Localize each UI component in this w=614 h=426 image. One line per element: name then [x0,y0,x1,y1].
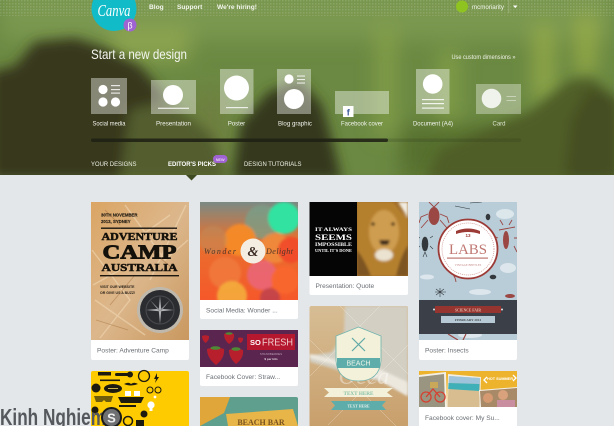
card: poster adventure camp: AUSTRALIA [102,262,178,274]
card: beach bar [200,397,298,426]
card: social media wonder [199,202,304,319]
icon: blog graphic [277,69,311,114]
card: beach poster: Ocea [339,364,389,390]
card: facebook cover my summer: HOT SUMMER [487,377,513,381]
card: poster adventure camp [91,202,189,360]
watermark: S [107,410,116,426]
card: facebook cover strawberry: Facebook Cover: Straw... [206,374,280,381]
badge: new: NEW [216,158,225,162]
user menu [456,0,518,13]
logo: Canva badge: Canva [98,1,130,20]
card: facebook cover my summer: Facebook cover: My Su... [425,415,500,422]
label: poster: Poster [228,122,245,128]
card: presentation quote: UNTIL IT'S DONE [315,248,352,253]
card: poster insects [417,202,517,360]
card: yellow icons poster [91,370,189,426]
card: poster insects: Poster: Insects [425,348,469,354]
icon: poster [220,69,254,114]
card: poster adventure camp: 30TH NOVEMBER [101,212,138,218]
card: poster insects: FEBRUARY 2014 [455,318,481,322]
tabs: DESIGN TUTORIALS [244,162,302,168]
card: poster insects: LABS [449,242,487,258]
card: facebook cover strawberry: FRESH [262,338,293,348]
logo: Canva badge: β [127,20,133,30]
card: presentation quote: Presentation: Quote [316,283,374,290]
top navigation [149,4,257,11]
heading: start a new design: Start a new design [91,47,187,62]
label: card: Card [492,122,506,128]
label: blog graphic: Blog graphic [278,122,312,128]
label: facebook cover: Facebook cover [341,122,383,128]
top navigation: We're hiring! [217,4,257,11]
card: facebook cover strawberry: SO [250,338,261,347]
link: use custom dimensions: Use custom dimensions » [452,54,516,61]
icon: document A4 [416,69,450,114]
card: poster adventure camp: Poster: Adventure Camp [97,348,169,354]
card: social media wonder: & [248,245,259,260]
icon: facebook cover: f [347,108,351,118]
top navigation: Blog [149,4,164,11]
card: poster adventure camp: VISIT OUR WEBSITE [100,285,135,289]
card: presentation quote [310,202,408,295]
tabs: YOUR DESIGNS [91,162,136,168]
tabs: EDITOR'S PICKS [168,162,216,168]
card: poster adventure camp: ADVENTURE [102,231,178,243]
logo: Canva badge [92,0,136,32]
card: beach poster: BEACH [346,360,371,368]
label: document A4: Document (A4) [413,122,453,128]
card: social media wonder: Social Media: Wonder ... [206,308,278,314]
card: beach poster: TEXT HERE [343,391,374,397]
card: facebook cover strawberry: $ per kilo [264,357,278,361]
card: poster adventure camp: CAMP [102,242,176,264]
top navigation: Support [177,4,203,11]
label: presentation: Presentation [156,122,191,128]
card: presentation quote: IMPOSSIBLE [315,242,353,248]
label: social media: Social media [92,122,126,128]
icon: card [476,84,521,114]
card: beach poster [310,306,408,426]
card: social media wonder: Wonder [204,247,237,256]
card: poster insects: VINTAGE BEETLES [455,263,482,267]
card: presentation quote: SEEMS [315,233,352,242]
card: facebook cover strawberry: STRAWBERRIES [260,352,282,356]
card: poster insects: SCIENCE FAIR [455,308,481,312]
icon: presentation [151,80,196,114]
card: poster insects: 13 [465,233,471,238]
card: facebook cover my summer [419,371,517,426]
active tab pointer [186,175,197,180]
card: social media wonder: Delight [265,247,294,256]
icon: social media [91,78,127,114]
carousel scrollbar [91,138,521,142]
icon: facebook cover [335,91,389,118]
card: poster adventure camp: OR GIVE US A BUZZ! [100,291,135,295]
header photo background [0,0,614,180]
user menu: mcmoriarity [472,4,505,11]
card: beach poster: TEXT HERE [348,404,370,408]
badge: new [213,155,228,163]
card: presentation quote: IT ALWAYS [315,227,352,233]
card: facebook cover strawberry [200,330,298,386]
card: poster adventure camp: 2013, SYDNEY [101,219,131,224]
tabs [91,162,302,168]
